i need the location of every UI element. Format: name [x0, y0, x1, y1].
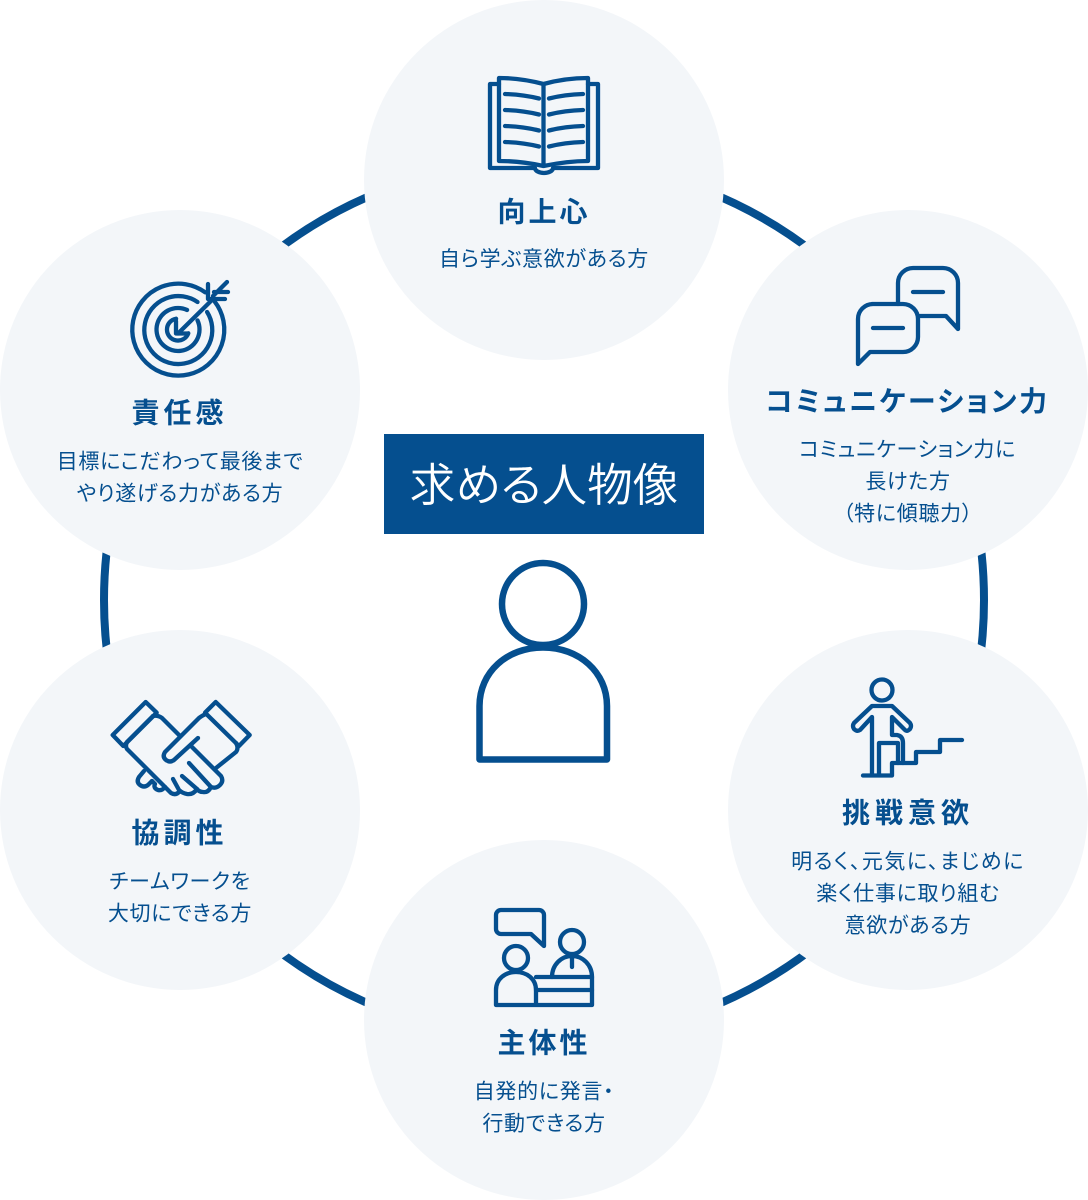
icon: speech bubbles — [858, 268, 958, 364]
heading: 主体性 — [497, 1028, 591, 1058]
description: 大切にできる方 — [108, 902, 252, 926]
icon: target with arrow — [132, 282, 228, 376]
panel: 主体性 — [364, 840, 724, 1200]
description — [108, 870, 252, 926]
panel: コミュニケーション力 — [728, 210, 1088, 570]
heading: 協調性 — [131, 818, 228, 848]
heading: 責任感 — [131, 398, 228, 428]
icon: person climbing stairs — [853, 680, 962, 776]
description — [57, 450, 303, 506]
description: 行動できる方 — [482, 1112, 606, 1136]
heading: 挑戦意欲 — [842, 798, 974, 828]
description: コミュニケーション力に — [799, 438, 1016, 462]
icon: handshake — [113, 702, 250, 794]
icon: open book — [490, 78, 598, 173]
heading: コミュニケーション力 — [765, 386, 1050, 417]
description: やり遂げる力がある方 — [77, 482, 283, 506]
description: 目標にこだわって最後まで — [57, 450, 303, 474]
panel: 協調性 — [0, 630, 360, 990]
panel: 向上心 — [364, 0, 724, 360]
description — [799, 438, 1016, 526]
center title banner — [384, 434, 704, 534]
icon: central person — [480, 563, 607, 760]
center title banner: 求める人物像 — [410, 460, 678, 511]
panel: 挑戦意欲 — [728, 630, 1088, 990]
description: チームワークを — [109, 870, 251, 894]
description — [791, 850, 1025, 938]
description: 自ら学ぶ意欲がある方 — [439, 248, 649, 271]
panel: 責任感 — [0, 210, 360, 570]
description: 明るく、元気に、まじめに — [791, 850, 1025, 874]
description: 楽く仕事に取り組む — [816, 882, 1000, 906]
connecting ring — [104, 160, 984, 1040]
description: （特に傾聴力） — [843, 502, 973, 526]
heading: 向上心 — [497, 196, 591, 228]
description: 意欲がある方 — [845, 914, 971, 938]
description: 長けた方 — [865, 470, 951, 494]
description: 自発的に発言・ — [474, 1080, 614, 1104]
icon: two people talking at a desk — [496, 910, 592, 1005]
description — [474, 1080, 614, 1136]
